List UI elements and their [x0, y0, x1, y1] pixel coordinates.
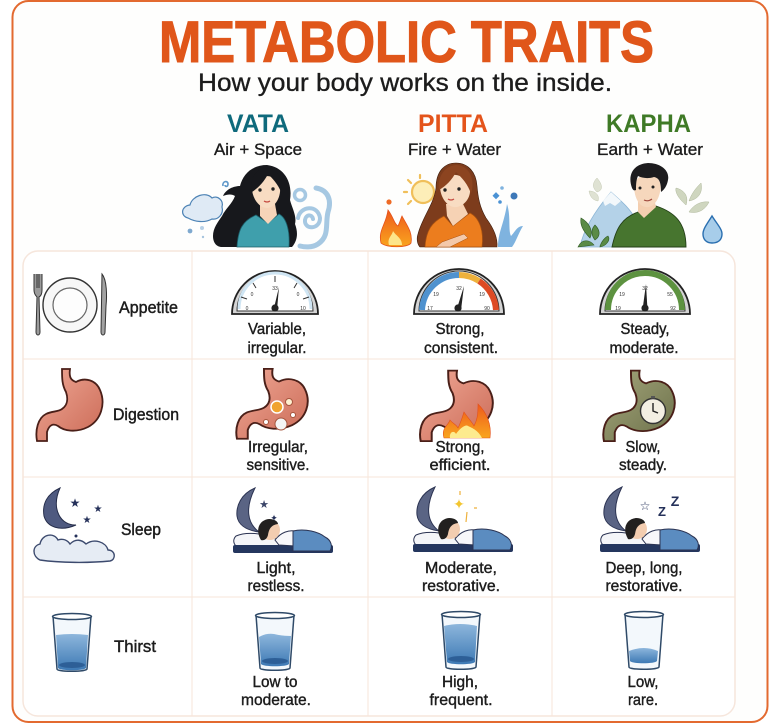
icon: moon, stars and cloud: ★: [83, 515, 92, 526]
text: Vata digestion: [246, 439, 310, 474]
gauge: Kapha appetite: [600, 269, 690, 314]
icon: Kapha sleep: Z: [671, 493, 680, 509]
icon: sun: [404, 175, 434, 204]
column header: Kapha: KAPHA: [606, 110, 691, 138]
gauge: Vata appetite: 0: [297, 292, 300, 298]
text: Vata digestion: Irregular,: [248, 439, 308, 456]
icon: Kapha stomach with clock: [603, 371, 675, 441]
icon: Vata sleep: [233, 488, 333, 553]
row: Digestion: [36, 369, 675, 474]
row: Appetite: [34, 269, 690, 357]
icon: green leaves bottom: [578, 218, 609, 247]
text: Kapha thirst: Low,: [628, 674, 658, 691]
label: Sleep: Sleep: [121, 520, 161, 539]
column header: Kapha: [597, 110, 703, 159]
gauge: Pitta appetite: 19: [433, 292, 439, 298]
hair back: [417, 163, 497, 247]
column header: Vata: [214, 110, 302, 159]
icon: Pitta glass: [442, 612, 480, 669]
gauge: Kapha appetite: 32: [642, 286, 648, 292]
gauge: Vata appetite: 0: [246, 306, 249, 312]
text: Kapha thirst: [628, 674, 658, 709]
text: Vata sleep: restless.: [248, 578, 304, 595]
icon: faded leaves top: [589, 178, 602, 201]
text: Vata thirst: moderate.: [241, 692, 311, 709]
illustration: Vata woman with cloud and wind: [183, 165, 330, 247]
shirt: [612, 206, 686, 247]
gauge: Pitta appetite: 90: [484, 306, 490, 312]
row: Sleep: [34, 487, 700, 595]
illustration: Kapha man with mountain, leaves and drop: [578, 163, 722, 247]
icon: Vata glass: [256, 612, 294, 670]
icon: wind swirl: [294, 188, 330, 247]
gauge: Vata appetite: [232, 271, 318, 314]
text: Pitta thirst: [430, 674, 492, 709]
icon: water splash: [492, 186, 523, 247]
text: Vata sleep: Light,: [256, 560, 296, 577]
text: Kapha sleep: [606, 560, 682, 595]
text: Kapha sleep: Deep, long,: [606, 560, 682, 577]
shirt: [425, 213, 482, 247]
gauge: Vata appetite: 0: [251, 292, 254, 298]
text: Kapha digestion: Slow,: [626, 439, 660, 456]
neck and face: [260, 204, 277, 224]
gauge: Kapha appetite: 55: [667, 292, 673, 298]
icon: Vata sleep: ★: [259, 499, 269, 511]
icon: Pitta sleep: ✦: [453, 496, 465, 512]
text: Kapha digestion: steady.: [619, 457, 667, 474]
text: Vata sleep: [248, 560, 304, 595]
text: Kapha appetite: [610, 321, 678, 357]
text: Pitta appetite: consistent.: [424, 340, 498, 357]
text: Pitta thirst: High,: [442, 674, 478, 691]
text: Pitta digestion: Strong,: [436, 439, 484, 456]
shirt: [237, 214, 289, 247]
title: METABOLIC TRAITS: [159, 10, 654, 75]
column header: Pitta: Fire + Water: [408, 140, 501, 159]
gauge: Pitta appetite: [414, 269, 504, 314]
gauge: Pitta appetite: 32: [456, 286, 462, 292]
gauge: Kapha appetite: 19: [619, 292, 625, 298]
icon: moon, stars and cloud: [34, 488, 114, 562]
illustration: Pitta woman with sun, fire and water: [380, 163, 523, 247]
icon: Kapha glass: [624, 612, 664, 669]
icon: plate and cutlery: [34, 274, 107, 335]
gauge: Kapha appetite: 19: [615, 306, 621, 312]
label: Appetite: Appetite: [119, 298, 178, 317]
column header: Pitta: PITTA: [418, 110, 488, 138]
text: Pitta digestion: efficient.: [430, 457, 490, 474]
icon: cloud: [183, 182, 228, 238]
icon: faded leaves right: [676, 183, 709, 213]
icon: Kapha sleep: ☆: [640, 499, 650, 513]
neck and face: [446, 204, 468, 226]
column header: Pitta: [408, 110, 501, 159]
icon: Pitta sleep: [413, 487, 513, 552]
table panel: [23, 251, 735, 716]
icon: stomach: [36, 369, 103, 441]
text: Pitta appetite: [424, 321, 498, 357]
label: Thirst: Thirst: [114, 637, 156, 656]
icon: Kapha sleep: [600, 487, 700, 552]
label: Digestion: Digestion: [113, 405, 179, 424]
neck and face: [638, 198, 656, 218]
row: Thirst: [52, 612, 664, 709]
text: Vata thirst: Low to: [252, 674, 298, 691]
text: Pitta sleep: restorative.: [422, 578, 500, 595]
text: Kapha sleep: restorative.: [606, 578, 682, 595]
icon: Vata stomach with bubbles: [236, 369, 308, 439]
text: Pitta thirst: frequent.: [430, 692, 492, 709]
hair back: [213, 165, 297, 247]
text: Vata thirst: [241, 674, 311, 709]
gauge: Vata appetite: 10: [300, 306, 306, 312]
icon: glass of water: [52, 614, 92, 671]
column header: Vata: Air + Space: [214, 140, 302, 159]
crossed arms: [436, 234, 468, 247]
text: Kapha appetite: moderate.: [610, 340, 678, 357]
text: Pitta digestion: [430, 439, 490, 474]
text: Kapha thirst: rare.: [628, 692, 658, 709]
icon: Vata sleep: ✦: [270, 513, 278, 523]
text: Pitta sleep: [422, 560, 500, 595]
icon: Kapha sleep: Z: [658, 504, 666, 519]
icon: moon, stars and cloud: ★: [70, 496, 80, 510]
gauge: Vata appetite: 33: [272, 286, 278, 292]
gauge: Kapha appetite: 92: [670, 306, 676, 312]
column header: Kapha: Earth + Water: [597, 140, 703, 159]
column header: Vata: VATA: [227, 110, 289, 138]
text: Pitta appetite: Strong,: [436, 321, 484, 338]
text: Pitta sleep: Moderate,: [425, 560, 497, 577]
text: Vata digestion: sensitive.: [246, 457, 310, 474]
icon: mountain: [580, 192, 636, 247]
gauge: Pitta appetite: 19: [479, 292, 485, 298]
text: Kapha appetite: Steady,: [620, 321, 670, 338]
icon: moon, stars and cloud: ★: [94, 504, 103, 515]
text: Kapha digestion: [619, 439, 667, 474]
icon: flames: [380, 199, 411, 247]
text: Vata appetite: irregular.: [248, 340, 306, 357]
text: Vata appetite: Variable,: [248, 321, 306, 338]
subtitle: How your body works on the inside.: [198, 69, 612, 97]
gauge: Pitta appetite: 17: [427, 306, 433, 312]
icon: water drop: [703, 216, 722, 243]
text: Vata appetite: [248, 321, 306, 357]
icon: Pitta stomach with flames: [420, 371, 493, 441]
